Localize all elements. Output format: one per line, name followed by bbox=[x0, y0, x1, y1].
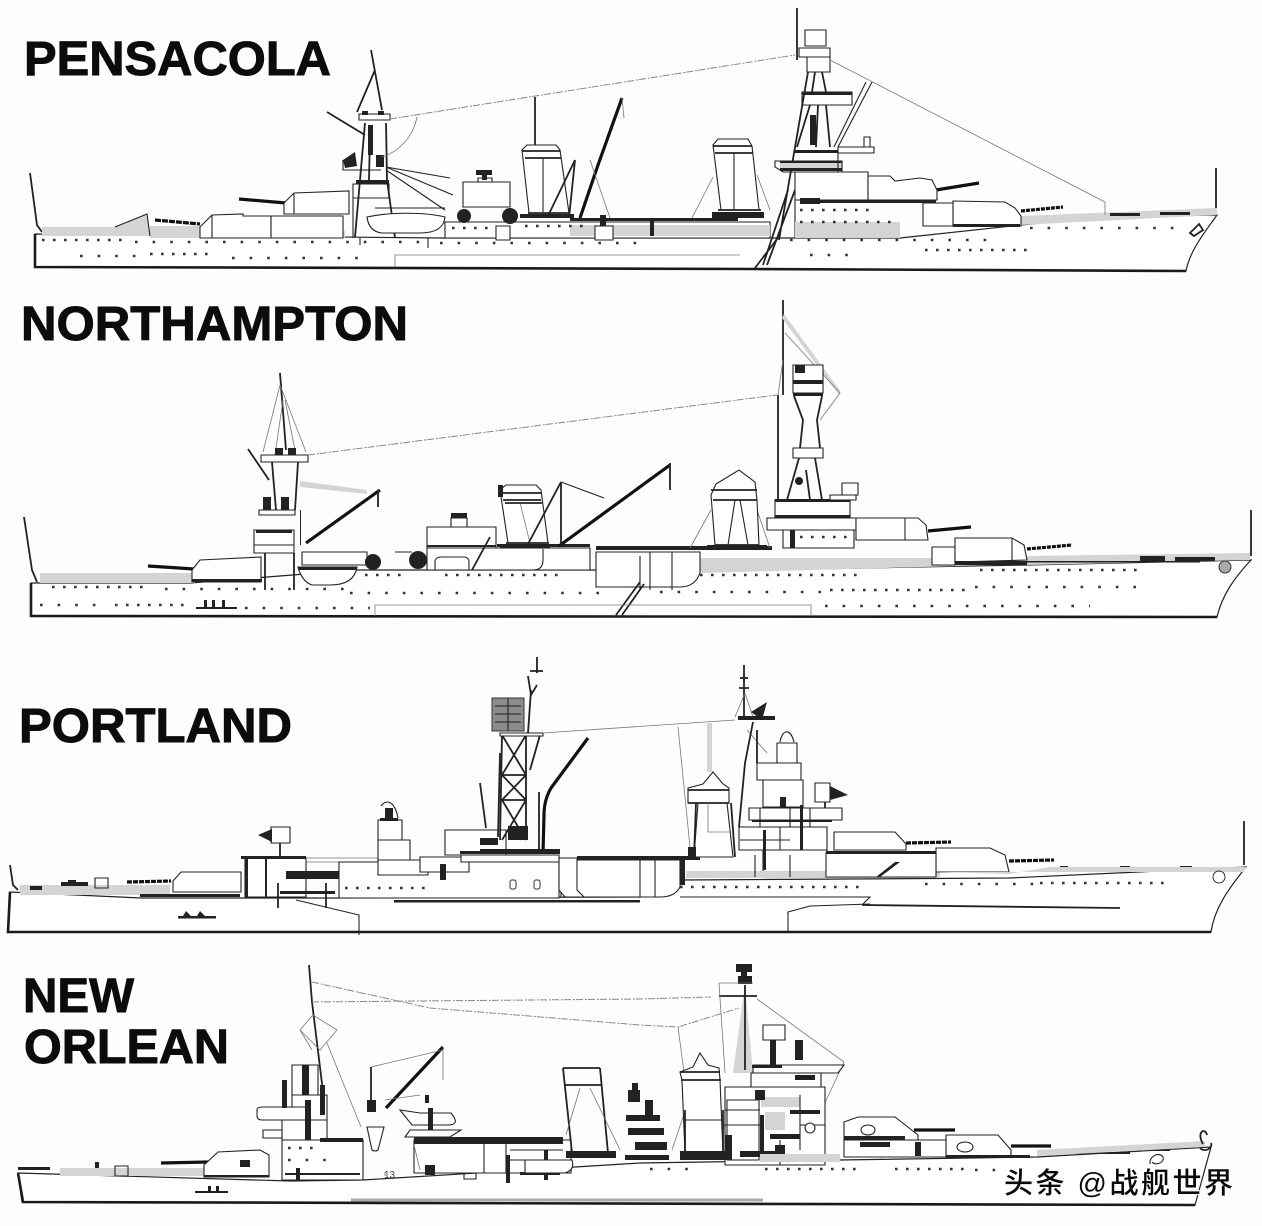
watermark: 头条 @战舰世界 bbox=[1004, 1167, 1233, 1200]
title: New Orleans (first line): NEW bbox=[23, 970, 135, 1023]
funnel 1 bbox=[563, 1068, 620, 1158]
ship: Northampton class profile bbox=[24, 300, 1251, 617]
aft tower bbox=[248, 373, 308, 590]
title: New Orleans (second line): ORLEAN bbox=[24, 1021, 229, 1074]
forestay bbox=[830, 60, 1105, 215]
forward tower bbox=[767, 300, 858, 548]
crane and aircraft bbox=[367, 1047, 461, 1151]
stern staff bbox=[24, 517, 37, 582]
hull bbox=[31, 560, 1251, 617]
jackstaff bbox=[1250, 510, 1252, 556]
waterline and portholes bbox=[296, 883, 1165, 935]
stern sign bbox=[196, 600, 237, 609]
forward superstructure bbox=[725, 1025, 844, 1165]
jackstaff bbox=[1215, 168, 1217, 212]
aft deck fittings bbox=[20, 878, 240, 897]
ship: New Orleans class profile bbox=[18, 964, 1211, 1205]
midship crane bbox=[527, 463, 670, 546]
title: Pensacola: PENSACOLA bbox=[24, 33, 331, 86]
hull bbox=[8, 867, 1246, 932]
aft turrets bbox=[115, 191, 349, 238]
aft superstructure bbox=[339, 802, 640, 902]
forward mast bbox=[719, 964, 757, 1073]
anchor bbox=[1213, 871, 1225, 883]
aft turret bbox=[148, 557, 262, 582]
funnel 2 bbox=[640, 139, 770, 221]
aft turret bbox=[127, 872, 241, 892]
hull bbox=[35, 215, 1217, 271]
aft turret bbox=[161, 1150, 269, 1177]
stern staff bbox=[30, 173, 42, 232]
title: Northampton: NORTHAMPTON bbox=[21, 298, 408, 351]
antenna wire bbox=[543, 720, 735, 733]
funnel 2 bbox=[690, 470, 770, 550]
waterline and portholes bbox=[40, 570, 1150, 616]
midship crane bbox=[547, 98, 624, 218]
deck bands bbox=[40, 553, 1250, 585]
hangar section bbox=[596, 546, 860, 615]
midship superstructure bbox=[427, 513, 590, 570]
forestay bbox=[757, 999, 844, 1107]
jackstaff bbox=[1243, 821, 1245, 865]
waterline and portholes bbox=[42, 228, 1180, 267]
aft deck fittings bbox=[18, 1162, 265, 1176]
funnel bbox=[678, 723, 735, 857]
midship section bbox=[559, 856, 700, 897]
forward tower bbox=[686, 665, 940, 878]
aft mast and tower bbox=[257, 965, 363, 1180]
funnel 1 bbox=[520, 97, 574, 218]
anchor bbox=[1150, 1155, 1163, 1164]
forward turrets bbox=[856, 518, 1215, 565]
stern staff bbox=[10, 865, 18, 890]
hangar block bbox=[241, 827, 378, 908]
funnel 2 bbox=[672, 1053, 730, 1160]
anchor bbox=[1219, 561, 1231, 573]
forward turrets bbox=[868, 176, 1190, 227]
antenna wire bbox=[308, 395, 777, 455]
ship: Pensacola class profile bbox=[30, 8, 1217, 271]
ship's boats and booms bbox=[360, 167, 453, 248]
midship superstructure bbox=[445, 170, 770, 240]
crane bbox=[480, 738, 588, 854]
bow curl bbox=[1200, 1131, 1211, 1150]
stern sign bbox=[178, 911, 216, 918]
aft crane bbox=[300, 481, 380, 543]
hangar blocks bbox=[414, 1137, 573, 1183]
midship cluster bbox=[625, 1083, 669, 1160]
antenna wires bbox=[312, 982, 739, 1072]
stern sign bbox=[195, 1186, 228, 1193]
antenna wire bbox=[390, 55, 795, 119]
aft deck band bbox=[42, 208, 1217, 238]
forward tower bbox=[755, 8, 936, 268]
radar tower bbox=[480, 657, 543, 840]
aft tripod tower bbox=[327, 50, 417, 238]
ship: Portland class profile bbox=[8, 657, 1246, 935]
forward turrets bbox=[826, 832, 1246, 877]
forward turrets bbox=[760, 1117, 1205, 1162]
title: Portland: PORTLAND bbox=[19, 700, 292, 753]
waterline and portholes: 13 bbox=[384, 1170, 396, 1181]
funnel 1 bbox=[498, 485, 550, 548]
hull bbox=[18, 1147, 1211, 1205]
boats and mounts bbox=[298, 551, 427, 585]
anchor bbox=[1190, 224, 1203, 236]
